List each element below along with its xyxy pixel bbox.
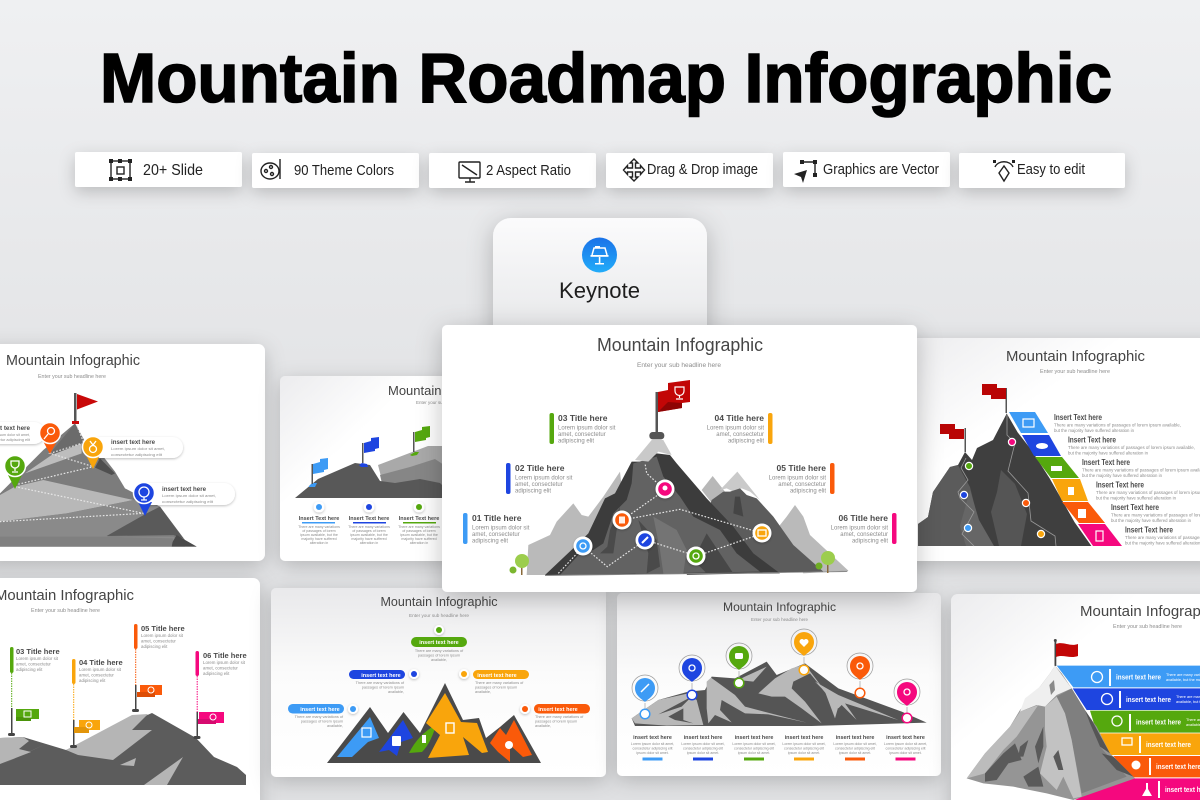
panel: three flags on ridge [280,376,510,561]
chip: 2 Aspect Ratio: 2 Aspect Ratio [486,162,571,179]
step text blocks: There are many variations of passages of lorem ipsum available, [1054,422,1181,428]
chip: Graphics are Vector: Graphics are Vector [823,161,939,178]
pin: amber [82,436,104,469]
step text blocks: but the majority have suffered alteration in [1082,473,1162,478]
column: green: There are many variations [398,525,440,529]
panel: two summits with coloured steps [900,338,1200,561]
pin: orange [847,653,873,698]
keynote card [493,218,707,358]
marker: orange [612,510,632,530]
panel: mountain range with balloon pins [617,593,941,776]
icon: keynote podium [582,238,617,272]
callout 02: adipiscing elit [515,488,551,494]
text columns: Lorem ipsum dolor sit amet, [782,742,826,746]
flag 05: Lorem ipsum dolor sit [141,633,184,638]
flag 06: amet, consectetur [203,666,238,670]
panel heading: Mountain Infographic [380,595,498,609]
step text blocks: but the majority have suffered alteration in [1111,518,1191,523]
band labels: insert text here [1136,720,1181,726]
callout 02 [506,463,573,494]
colour bars [642,758,916,760]
chip: 90 Theme Colors: 90 Theme Colors [294,162,394,179]
callout 02: amet, consectetur [515,482,563,488]
flag 03: adipiscing elit [16,667,43,672]
callout 05: adipiscing elit [790,488,826,494]
text columns: insert text here [684,735,722,741]
pin: green [726,643,752,688]
step text blocks: There are many variations of passages of lorem ipsum available, [1068,445,1195,450]
label: blue [349,669,419,694]
text columns: Lorem ipsum dolor sit amet, [631,742,674,746]
panel: mountain with pins (top left): Enter your sub headline here [38,374,106,380]
step text blocks: but the majority have suffered alteration in [1096,496,1176,500]
column: dark blue: ipsum available, but the [350,533,388,537]
band labels: insert text here [1126,697,1171,704]
callout 01: Lorem ipsum dolor sit [472,526,530,532]
column: blue: Insert Text here [299,516,339,522]
panel heading: Mountain Infographic [1006,349,1145,365]
text columns: ipsum dolor sit amet. [839,751,871,755]
label: light blue: There are many variations of [295,715,344,719]
label: light blue: insert text here [300,707,340,713]
label: amber: available, [475,690,491,694]
text columns: ipsum dolor sit amet. [687,751,719,755]
callout 03: Lorem ipsum dolor sit [558,426,616,432]
text columns: insert text here [735,735,773,741]
band labels: insert text here [1116,674,1161,682]
panel: mountain range with balloon pins: Enter your sub headline here [751,617,808,622]
marker: light blue [574,536,592,556]
text columns: ipsum dolor sit amet. [738,751,770,755]
label: orange: available, [535,724,551,728]
panel: mountain with pins (top left): insert text here [162,486,206,493]
label: orange: passages of lorem ipsum [535,720,577,724]
label: light blue: available, [327,724,343,728]
text columns: consectetur adipiscing elit [683,746,723,750]
pin: amber [791,629,817,675]
chip: 90 Theme Colors [252,153,419,188]
column: dark blue: alteration in [360,541,378,545]
callout 01 [463,513,530,544]
callout 06: amet, consectetur [840,532,888,538]
flag 06: Lorem ipsum dolor sit [203,660,246,665]
label: amber: insert text here [477,673,517,679]
label pills [0,422,235,505]
callout 04: Lorem ipsum dolor sit [707,426,764,432]
label: blue: insert text here [361,673,401,679]
chip: Easy to edit [959,153,1125,188]
flag 05: amet, consectetur [141,638,176,644]
callout 01: amet, consectetur [472,532,520,538]
chip: 2 Aspect Ratio [429,153,596,188]
coloured step bands [1009,412,1122,546]
callout 05: amet, consectetur [778,482,826,488]
column: blue: majority have suffered [301,537,337,541]
icons: trees [510,551,835,575]
column: dark blue: of passages of lorem [352,529,386,533]
panel heading: Mountain Infographic [388,383,510,398]
text columns: insert text here [633,735,672,741]
label: amber [459,669,529,694]
flag 05: adipiscing elit [141,644,168,649]
dark mountain [918,413,1092,546]
label: light blue [288,704,358,728]
column: blue: of passages of lorem [302,529,336,533]
column: dark blue: majority have suffered [351,537,387,541]
keynote label: Keynote [559,278,640,303]
callout 05: Lorem ipsum dolor sit [769,476,826,482]
text columns: insert text here [886,735,925,741]
text columns: Lorem ipsum dolor sit amet, [681,742,725,746]
callout 01: 01 Title here [472,513,522,523]
callout 04 [707,413,772,444]
callout 03: adipiscing elit [558,438,594,444]
illustration: main mountain [527,432,848,576]
step text blocks: Insert Text here [1111,503,1159,512]
panel: coloured peaks with pill labels: Enter your sub headline here [409,613,470,618]
pin: dark blue [679,655,705,700]
text columns: Lorem ipsum dolor sit amet, [833,742,877,746]
callout 03: amet, consectetur [558,432,606,438]
red flags [940,384,1007,452]
label: green: insert text here [419,640,459,646]
column: green: majority have suffered [401,537,437,541]
panel heading: Mountain Infographic [723,600,836,614]
ridge [295,446,450,498]
panel: main mountain infographic [442,325,917,592]
text columns: consectetur adipiscing elit [734,746,774,750]
column: green [398,502,440,545]
icon: summit flag with trophy [656,380,690,433]
band labels [1116,673,1200,794]
callout 01: adipiscing elit [472,538,508,544]
column: blue: ipsum available, but the [300,533,338,537]
callout 06: Lorem ipsum dolor sit [831,526,888,532]
pin: pink [894,679,920,723]
label: light blue: passages of lorem ipsum [301,720,343,724]
callout 06 [831,513,896,544]
step text blocks [1054,413,1200,546]
flag 06 [194,651,247,739]
text columns: consectetur adipiscing elit [784,746,824,750]
route markers [574,480,772,566]
marker: pink [656,480,674,498]
panel: mountain with pins (top left): Lorem ipsum dolor sit amet, [162,493,216,498]
callout 06: adipiscing elit [852,538,888,544]
panel: four flag markers on ridge [0,578,260,800]
pin: green [4,456,26,489]
column: dark blue: There are many variations [348,525,390,529]
flag 03: amet, consectetur [16,662,51,666]
callout 02: 02 Title here [515,463,565,473]
flag 06: adipiscing elit [203,671,230,676]
pin: light blue [632,675,658,719]
callout 04: adipiscing elit [728,438,764,444]
panel: mountain with pins (top left): consectetur adipiscing elit [111,452,163,457]
chip: Drag & Drop image [606,153,773,188]
label: blue: There are many variations of [356,681,405,685]
panel: mountain with horizontal bands: Enter your sub headline here [1113,624,1182,630]
flag 03: Lorem ipsum dolor sit [16,656,59,661]
summit flag [1054,639,1078,666]
panel: mountain with pins (top left): insert text here [111,439,155,446]
layered mountain [0,423,197,547]
chip: 20+ Slide [75,152,242,187]
panel: four flag markers on ridge: Enter your sub headline here [31,608,100,614]
panel: two summits with coloured steps: Enter your sub headline here [1040,369,1110,375]
pin: orange [40,422,60,454]
column: green: Insert Text here [399,516,439,522]
panel: mountain with pins (top left): consectetur adipiscing elit [162,499,214,504]
text columns: ipsum dolor sit amet. [788,751,820,755]
column: green: ipsum available, but the [400,533,438,537]
column: blue: alteration in [310,541,328,545]
band labels: insert text here [1146,742,1191,749]
label: amber: passages of lorem ipsum [475,686,517,690]
sub headline: Enter your sub headline here [637,363,722,369]
step text blocks: Insert Text here [1125,526,1173,534]
callout 03 [550,413,616,444]
text columns: insert text here [836,735,874,741]
chip: Graphics are Vector [783,152,950,187]
ridge silhouette [0,713,246,785]
range [632,662,927,726]
flag 04: Lorem ipsum dolor sit [79,667,122,672]
column: dark blue [348,502,390,545]
panel: coloured peaks with pill labels [271,588,606,777]
flags [309,426,430,487]
flag 04 [70,658,123,748]
band icons and dividers [1092,669,1160,798]
step text blocks: but the majority have suffered alteration in [1054,428,1134,433]
callout 05: 05 Title here [777,463,826,473]
step text blocks: but the majority have suffered alteration in [1068,450,1148,456]
text columns: insert text here [785,735,823,741]
flag 04: 04 Title here [79,658,123,667]
text columns: Lorem ipsum dolor sit amet, [884,742,927,746]
marker: green [686,546,706,566]
main heading: Mountain Infographic [597,335,763,355]
column: blue [298,502,340,545]
label: orange: There are many variations of [535,715,584,719]
chip: Drag & Drop image: Drag & Drop image [647,161,758,178]
title: Mountain Roadmap Infographic [100,39,1112,117]
text columns: consectetur adipiscing elit [632,746,673,750]
flag 03: 03 Title here [16,647,60,656]
panel: mountain with pins (top left): Lorem ipsum dolor sit amet, [111,446,165,451]
text columns [631,735,927,755]
route markers [960,438,1045,538]
text columns: consectetur adipiscing elit [835,746,875,750]
column: dark blue: Insert Text here [349,516,389,522]
label: amber: There are many variations of [475,681,524,685]
flag 03 [8,647,60,736]
text columns: ipsum dolor sit amet. [636,751,669,755]
marker: blue [636,530,654,550]
column: blue: There are many variations [298,525,340,529]
column: green: of passages of lorem [402,529,436,533]
pin columns [632,629,920,723]
callout 04: amet, consectetur [716,432,764,438]
column: green: alteration in [410,541,428,545]
peaks [327,683,541,763]
step text blocks: Insert Text here [1096,480,1144,490]
flag on summit [72,393,98,424]
callout 06: 06 Title here [839,513,888,523]
flag 04: adipiscing elit [79,678,106,683]
coloured bands [1057,666,1200,800]
step text blocks: Insert Text here [1068,436,1116,444]
text columns: consectetur adipiscing elit [885,746,926,750]
flag 05 [132,624,185,712]
callout 03: 03 Title here [558,413,608,423]
label: orange [520,704,590,728]
callout 05 [769,463,834,494]
chip: Easy to edit: Easy to edit [1017,161,1086,178]
label: green: There are many variations of [415,649,464,653]
step text blocks: Insert Text here [1054,413,1102,422]
panel: three flags on ridge: Enter your sub headline here [416,400,474,405]
step text blocks: Insert Text here [1082,458,1130,467]
label: green [411,625,467,662]
panel: mountain with pins (top left) [0,344,265,561]
rock mountain [967,666,1135,800]
panel heading: Mountain Infographic [6,353,140,369]
flag 05: 05 Title here [141,624,185,633]
feature chips row [75,152,1125,188]
label: green: passages of lorem ipsum [418,654,460,658]
flag 04: amet, consectetur [79,672,114,678]
marker: amber [752,524,772,542]
label: blue: passages of lorem ipsum [362,686,404,690]
text columns: ipsum dolor sit amet. [889,751,922,755]
pin: blue [134,482,154,516]
chip: 20+ Slide: 20+ Slide [143,162,203,179]
text columns: Lorem ipsum dolor sit amet, [732,742,776,746]
label: blue: available, [388,690,404,694]
panel: mountain with horizontal bands [951,594,1200,800]
flag 06: 06 Title here [203,651,247,660]
label: green: available, [431,658,447,662]
label: orange: insert text here [538,707,578,713]
callout 04: 04 Title here [715,413,764,423]
callout 02: Lorem ipsum dolor sit [515,476,573,482]
